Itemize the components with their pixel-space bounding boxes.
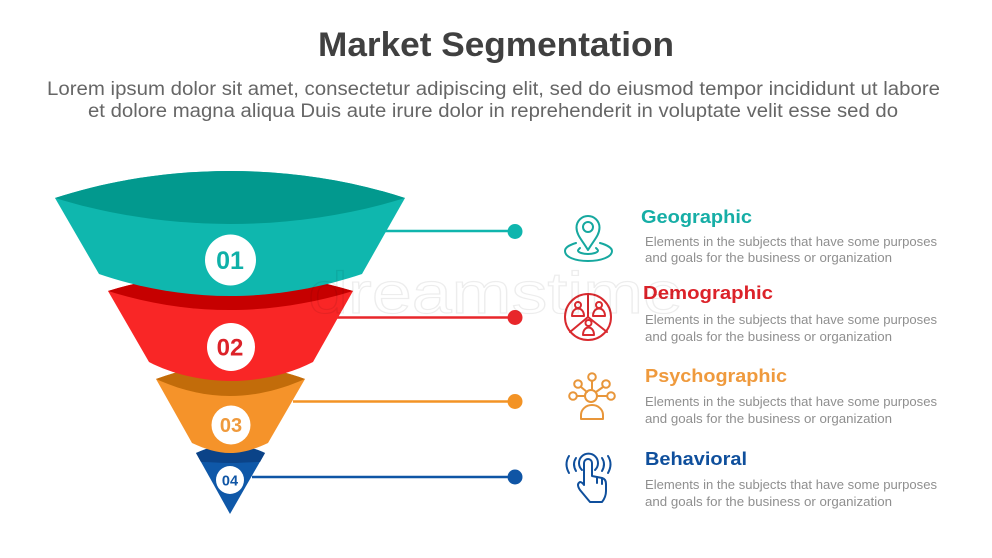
connector: psychographic xyxy=(293,394,522,409)
funnel segment 02 xyxy=(108,273,353,381)
funnel segment 01 xyxy=(55,171,405,296)
connector: demographic xyxy=(337,310,522,325)
intro text: Lorem ipsum dolor sit amet, consectetur adipiscing elit, sed do eiusmod tempor incididunt ut labore xyxy=(47,79,940,100)
text block: behavioral: and goals for the business or organization xyxy=(645,494,892,509)
intro text: et dolore magna aliqua Duis aute irure dolor in reprehenderit in voluptate velit esse sed do xyxy=(88,101,898,122)
funnel segment 03: 03 xyxy=(220,415,242,437)
text block: psychographic: Elements in the subjects that have some purposes xyxy=(645,394,937,409)
text block: psychographic: Psychographic xyxy=(645,366,787,386)
connector: behavioral xyxy=(252,470,522,484)
text block: demographic: and goals for the business or organization xyxy=(645,329,892,344)
connector: geographic xyxy=(385,224,522,239)
funnel segment 04: 04 xyxy=(222,474,238,490)
icon: audience segments xyxy=(565,294,611,340)
funnel segment 01: 01 xyxy=(216,247,244,275)
funnel segment 03 xyxy=(156,365,305,453)
icon: touch gesture xyxy=(566,454,610,502)
text block: geographic: and goals for the business or organization xyxy=(645,250,892,265)
text block: geographic: Elements in the subjects that have some purposes xyxy=(645,234,937,249)
text block: psychographic: and goals for the business or organization xyxy=(645,411,892,426)
text block: geographic: Geographic xyxy=(641,207,752,227)
text block: geographic xyxy=(641,207,937,265)
title: Market Segmentation xyxy=(318,26,674,64)
text block: behavioral: Behavioral xyxy=(645,449,747,469)
funnel segment 04 xyxy=(196,445,265,514)
intro text xyxy=(47,79,940,122)
watermark: dreamstime xyxy=(308,261,683,326)
icon: psychographic network xyxy=(569,373,615,419)
funnel segment 02: 02 xyxy=(217,334,243,362)
icon: location pin xyxy=(565,216,612,261)
text block: demographic: Demographic xyxy=(643,283,773,303)
text block: psychographic xyxy=(645,366,937,426)
text block: demographic: Elements in the subjects that have some purposes xyxy=(645,312,937,327)
text block: demographic xyxy=(643,283,937,344)
text block: behavioral: Elements in the subjects that have some purposes xyxy=(645,477,937,492)
text block: behavioral xyxy=(645,449,937,509)
